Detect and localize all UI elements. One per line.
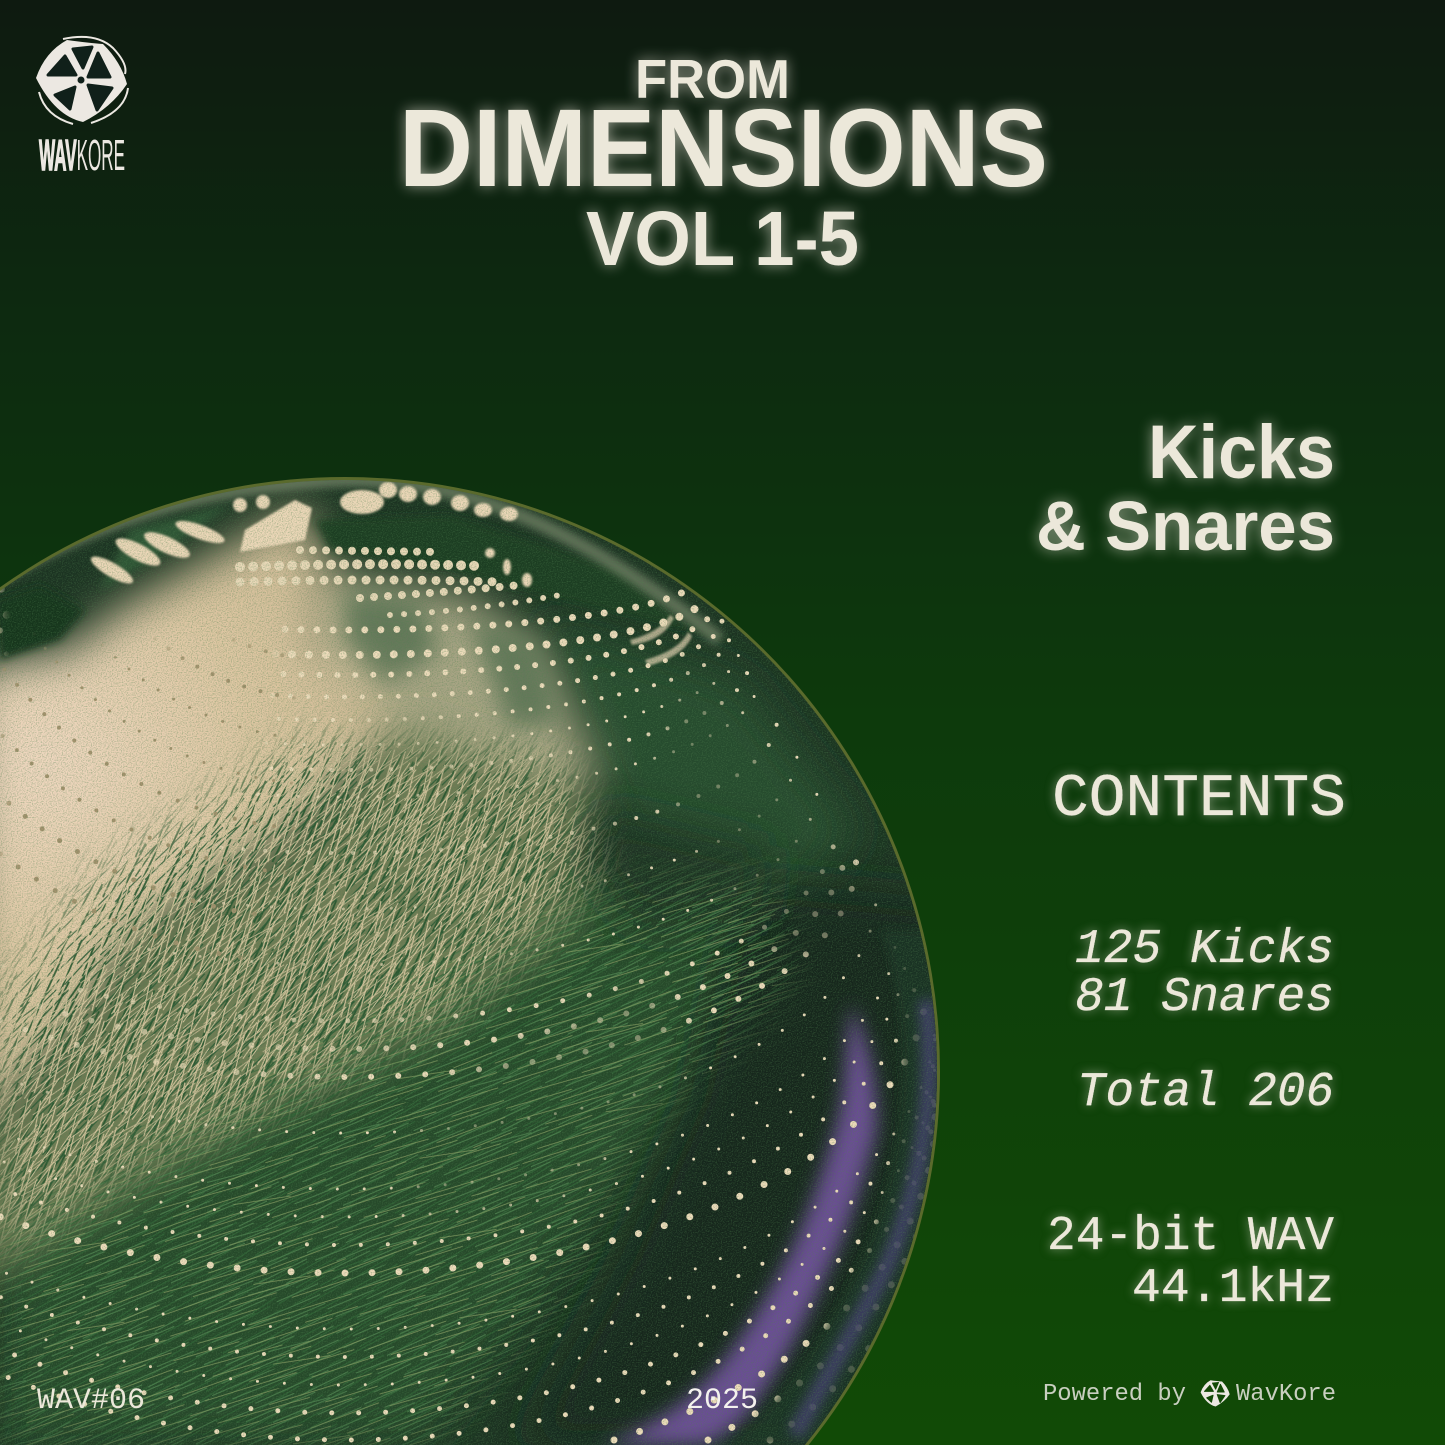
- fuzzy top rim: [0, 480, 720, 640]
- fur texture: tan zone: [0, 708, 627, 1268]
- title: from: FROM: [635, 48, 790, 110]
- catalogue number: WAV#06: [37, 1384, 145, 1418]
- year: 2025: [686, 1384, 758, 1418]
- green-tan transition: [0, 730, 590, 1290]
- mid green body: [0, 860, 760, 1445]
- subtitle: kicks: Kicks: [1148, 410, 1335, 495]
- green mottling in cap: [340, 590, 560, 730]
- dark patch centre right: [590, 810, 770, 930]
- icon: small WavKore mark: [1201, 1380, 1230, 1406]
- wavkore name: WavKore: [1236, 1381, 1336, 1408]
- logo wordmark: WAVKORE: [39, 131, 125, 180]
- purple band: [600, 1005, 877, 1445]
- sphere base green: [0, 470, 945, 1445]
- powered by: Powered by: [1043, 1381, 1186, 1408]
- title: dimensions: DIMENSIONS: [399, 87, 1048, 210]
- purple rim band: [795, 1000, 929, 1435]
- fur texture: green zone: [0, 852, 815, 1445]
- sphere olive rim: [0, 477, 940, 1445]
- upper right green haze: [554, 626, 854, 887]
- cream upper-left patch: [0, 505, 400, 1150]
- cream ridge highlights on top edge: [88, 482, 692, 666]
- total count: Total 206: [1077, 1066, 1334, 1120]
- dot rows: cream area: [0, 632, 314, 960]
- sphere artwork: [0, 477, 940, 1445]
- top dark rim shapes: [0, 585, 85, 660]
- format: 24-bit WAV: [1047, 1210, 1334, 1264]
- contents heading: CONTENTS: [1052, 766, 1346, 834]
- logo: WavKore mark: [36, 37, 128, 124]
- sample rate: 44.1kHz: [1132, 1262, 1334, 1316]
- kick count: 125 Kicks: [1075, 923, 1334, 977]
- title: vol 1-5: VOL 1-5: [586, 196, 859, 282]
- grain overlay: [0, 470, 945, 1445]
- mottled tan top cap: [300, 570, 600, 820]
- dark lower right side: [520, 880, 960, 1445]
- dimming veil over right side dots: [750, 932, 936, 1444]
- dot rows: top cap: [240, 550, 560, 615]
- snare count: 81 Snares: [1075, 971, 1334, 1025]
- subtitle: and snares: & Snares: [1036, 487, 1335, 565]
- dot rows: latitude arcs: [0, 577, 935, 1440]
